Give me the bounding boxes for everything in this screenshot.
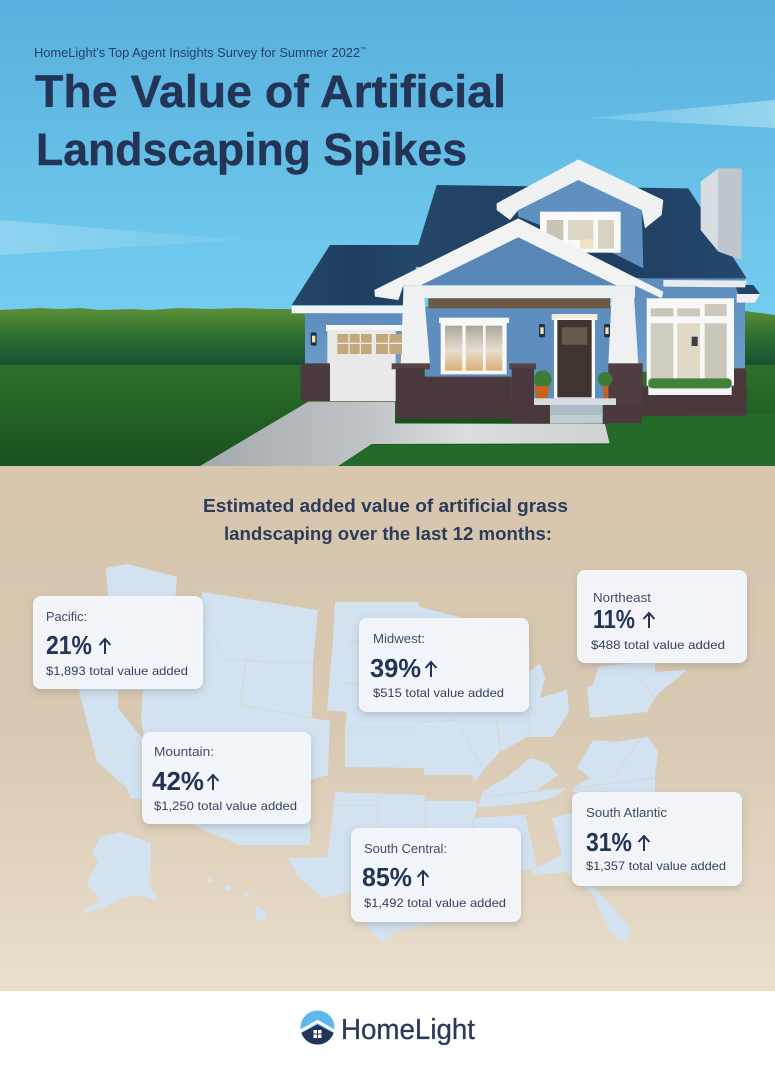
garage door	[326, 325, 403, 401]
heading: estimated added value: Estimated added value of artificial grass	[203, 496, 568, 516]
card: Northeast: 11%	[593, 604, 635, 634]
map region: pacific	[78, 564, 177, 800]
card: Mountain: 42%	[152, 766, 204, 796]
arrow	[208, 775, 218, 790]
card: Pacific: Pacific:	[46, 610, 87, 624]
dormer trim	[497, 159, 663, 228]
US map	[77, 564, 700, 943]
arrow	[638, 836, 650, 851]
house illustration	[200, 159, 775, 466]
card: South Atlantic: $1,357 total value added	[586, 859, 726, 873]
left garage pier	[301, 363, 330, 401]
dormer wall	[517, 179, 643, 268]
map region: midwest	[327, 602, 569, 782]
HomeLight logo	[299, 1010, 475, 1046]
front door	[552, 314, 597, 398]
arrow	[418, 871, 428, 886]
card: Midwest: 39%	[370, 653, 421, 683]
card: South Atlantic: South Atlantic	[586, 806, 667, 820]
card: Midwest: Midwest:	[373, 632, 425, 646]
front lawn	[0, 365, 775, 466]
right side wall	[613, 278, 745, 372]
background hedge	[0, 308, 775, 370]
card: South Atlantic	[572, 792, 742, 886]
brick base	[392, 363, 747, 423]
flower box	[648, 378, 732, 395]
card: Pacific: $1,893 total value added	[46, 664, 188, 678]
porch wall	[425, 307, 615, 400]
chimney	[701, 168, 742, 260]
porch window	[439, 318, 509, 374]
front lawn patch	[338, 413, 775, 466]
lamp: garage	[311, 332, 317, 346]
gable wall	[420, 237, 617, 285]
title	[35, 66, 506, 175]
card: Northeast: $488 total value added	[591, 638, 725, 652]
front steps	[534, 398, 616, 424]
title: The Value of Artificial	[35, 66, 506, 117]
garage fascia	[292, 306, 405, 313]
card: Pacific: 21%	[46, 630, 92, 660]
arrow	[426, 662, 436, 677]
card: South Central: 85%	[362, 862, 412, 892]
card: Pacific	[33, 596, 203, 689]
lamp: porch right	[604, 324, 610, 337]
heading: estimated added value: landscaping over the last 12 months:	[224, 524, 552, 544]
map region: east south central	[478, 758, 567, 808]
title: Landscaping Spikes	[36, 124, 467, 175]
arrow	[644, 613, 654, 628]
card: Mountain: $1,250 total value added	[154, 799, 297, 813]
map region: northeast	[587, 660, 687, 718]
dormer window	[540, 212, 621, 253]
footer band	[0, 991, 775, 1068]
card: Mountain	[142, 732, 311, 824]
porch beam	[403, 286, 635, 298]
garage wall	[305, 313, 405, 370]
gable trim	[374, 218, 663, 300]
cloud: right	[590, 100, 775, 128]
logo wordmark: HomeLight	[341, 1014, 475, 1046]
low front hedge	[395, 419, 512, 423]
card: South Central: South Central:	[364, 842, 447, 856]
map region: mountain	[141, 592, 330, 845]
driveway	[200, 402, 610, 466]
card: South Central: $1,492 total value added	[364, 896, 506, 910]
sky background	[0, 0, 775, 320]
card: South Central	[351, 828, 521, 922]
potted plants	[534, 370, 612, 399]
card: Mountain: Mountain:	[154, 745, 214, 759]
right column	[608, 295, 638, 365]
map region: maine	[665, 590, 700, 650]
right eave	[663, 280, 747, 287]
arrow	[100, 639, 110, 654]
heading: estimated added value	[203, 496, 568, 544]
main roof	[412, 185, 747, 278]
large window	[647, 298, 734, 386]
garage roof	[292, 245, 418, 305]
porch ceiling	[428, 298, 610, 308]
map region: hawaii	[208, 878, 267, 922]
card: Midwest: $515 total value added	[373, 686, 504, 700]
card: Midwest	[359, 618, 529, 712]
card: Northeast: Northeast	[593, 591, 652, 605]
lamp: porch left	[539, 324, 545, 337]
left column	[401, 293, 430, 365]
cloud: left	[0, 220, 245, 255]
small right roof	[735, 285, 760, 294]
lower sand panel	[0, 466, 775, 991]
survey subtitle: ™	[360, 46, 366, 53]
map region: alaska	[77, 832, 160, 915]
map region: south atlantic	[533, 737, 658, 943]
map gap: nevada channel	[118, 690, 143, 738]
map region: south central	[288, 792, 537, 943]
card: Northeast	[577, 570, 747, 663]
card: South Atlantic: 31%	[586, 827, 632, 857]
logo icon	[299, 1010, 336, 1045]
survey subtitle: HomeLight’s Top Agent Insights Survey for Summer 2022	[34, 45, 364, 60]
